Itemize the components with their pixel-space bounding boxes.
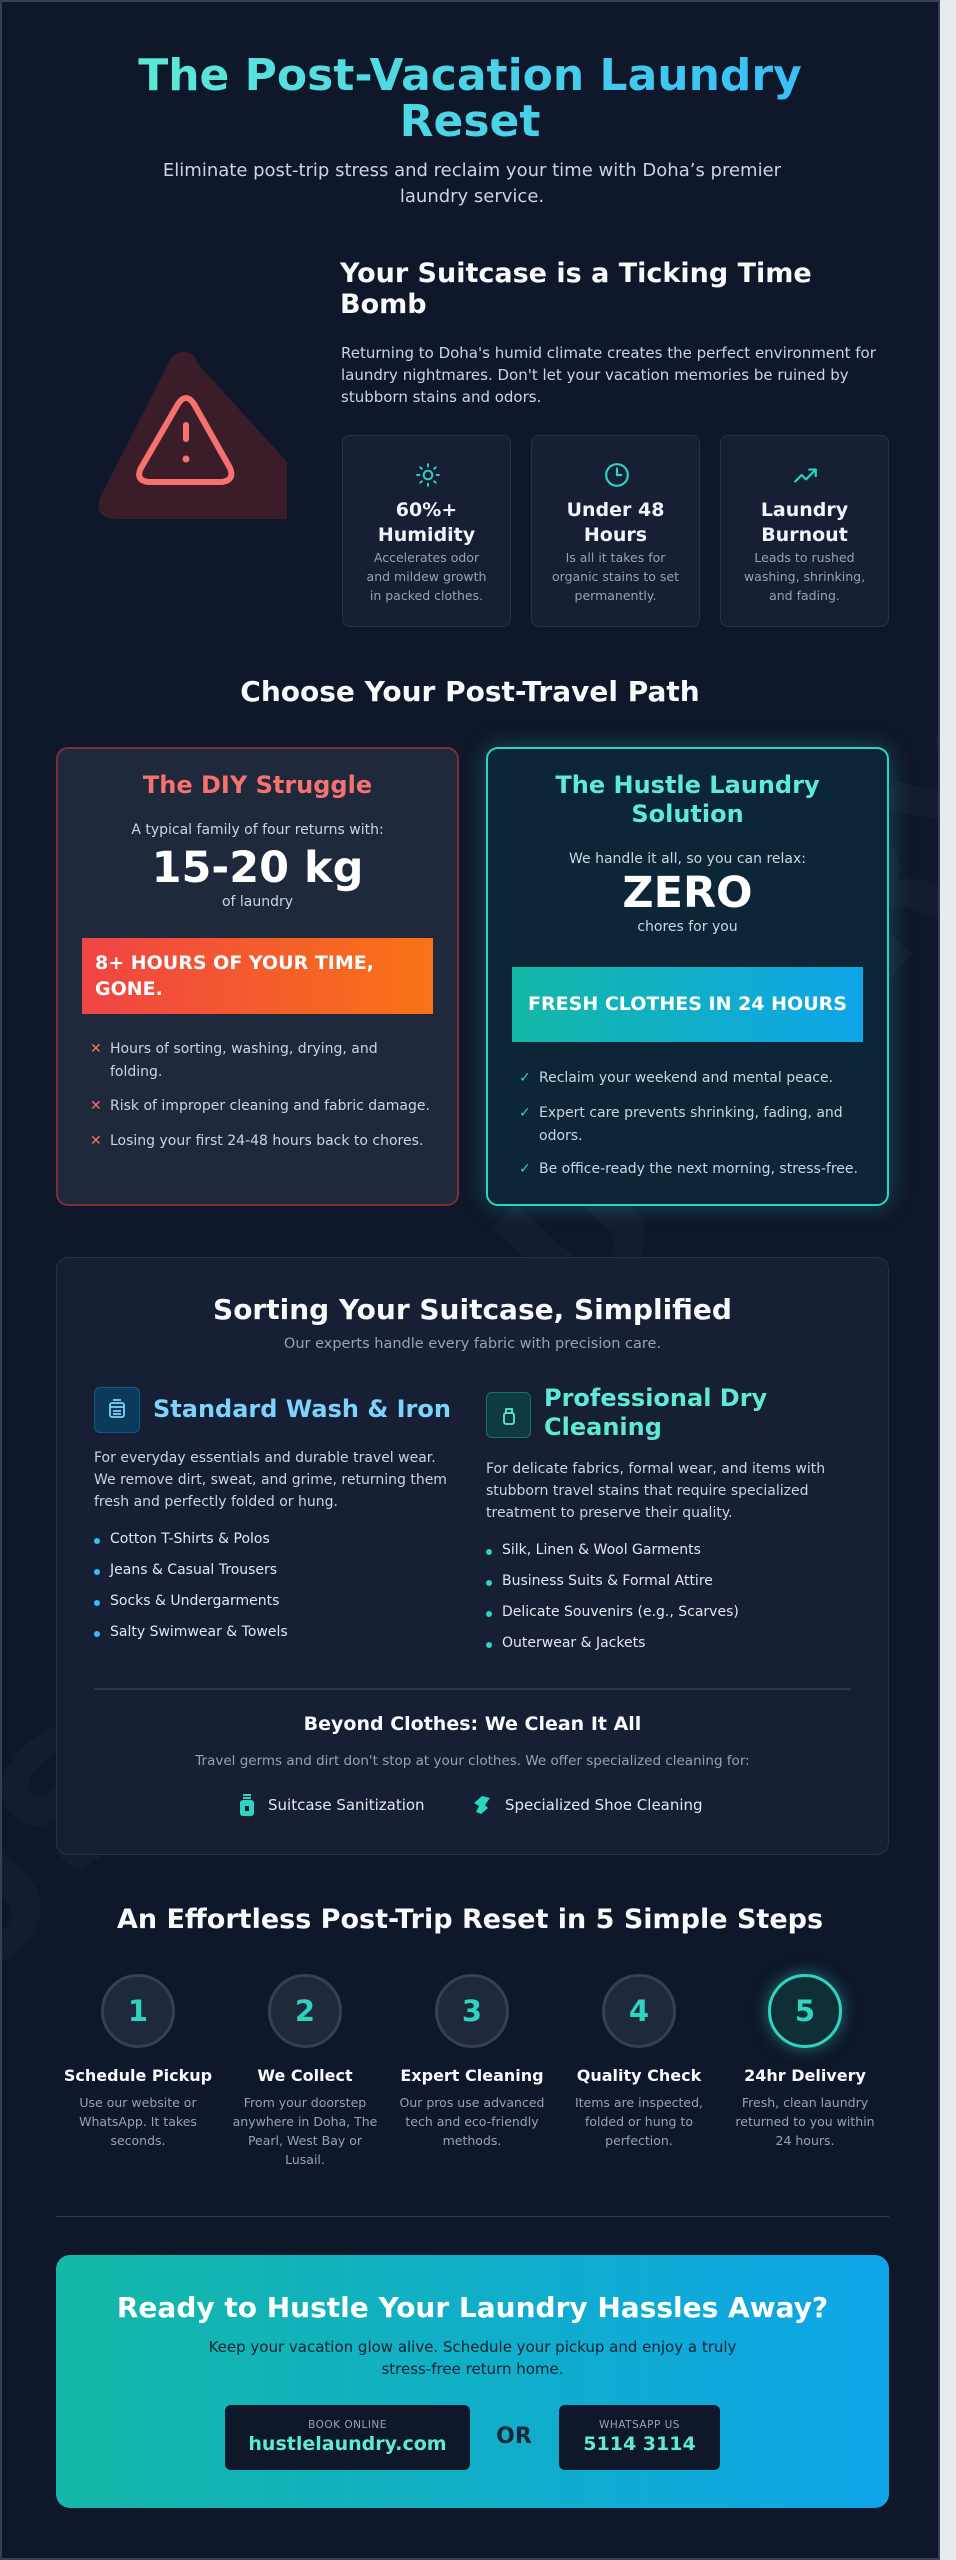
step 3: 3 [462,1994,482,2028]
heading: choose path: Choose Your Post-Travel Path [240,675,700,708]
heading: beyond clothes: Beyond Clothes: We Clean It All [304,1713,641,1735]
description: For delicate fabrics, formal wear, and items with stubborn travel stains that require specialized treatment to preserve their quality. [486,1461,825,1521]
OR: OR [496,2424,532,2449]
item: suitcase sanitization: Suitcase Sanitization [268,1796,425,1814]
bullet list: Salty Swimwear & Towels [110,1624,288,1640]
step 2: From your doorstep anywhere in Doha, The Pearl, West Bay or Lusail. [233,2095,377,2167]
stat card: burnout [720,435,889,627]
step 2: We Collect [257,2066,353,2085]
bullet list: Jeans & Casual Trousers [110,1562,277,1578]
DIY callout [82,938,433,1014]
solution stat [569,851,806,935]
DIY callout: 8+ HOURS OF YOUR TIME, GONE. [95,952,374,1000]
button: book online: BOOK ONLINE [308,2419,387,2431]
stat card: burnout: Laundry [761,499,848,521]
heading: Professional Dry Cleaning [544,1384,767,1441]
description: For everyday essentials and durable travel wear. We remove dirt, sweat, and grime, returning them fresh and perfectly folded or hung. [94,1450,447,1510]
icon: washer [94,1387,140,1433]
panel: Hustle solution: ✓ [519,1105,531,1121]
bullet list: Outerwear & Jackets [502,1635,645,1651]
solution title [555,771,820,828]
heading: Standard Wash & Iron [153,1395,451,1423]
button: whatsapp: 5114 3114 [583,2433,696,2455]
stat card: humidity: Humidity [378,524,475,546]
panel: DIY struggle: ✕ [90,1041,102,1057]
DIY list: Hours of sorting, washing, drying, and folding. [110,1041,378,1080]
bullet list: Socks & Undergarments [110,1593,279,1609]
step 5: 5 [795,1994,815,2028]
column: standard wash [94,1387,451,1640]
bullet list: Business Suits & Formal Attire [502,1573,713,1589]
step 4 [575,1974,703,2148]
solution callout [512,967,863,1042]
DIY title: The DIY Struggle [143,771,372,799]
item: suitcase sanitization [240,1794,425,1816]
stat card: 48 hours [531,435,700,627]
solution stat: We handle it all, so you can relax: [569,851,806,867]
step 1: 1 [128,1994,148,2028]
bullet list [486,1542,739,1651]
step 4: Items are inspected, folded or hung to perfection. [575,2095,703,2148]
panel: DIY struggle: ✕ [90,1133,102,1149]
bullet list: Cotton T-Shirts & Polos [110,1531,270,1547]
step 5 [735,1965,875,2148]
item: shoe cleaning: Specialized Shoe Cleaning [505,1796,703,1814]
solution list [519,1070,858,1177]
stat card: burnout: Leads to rushed washing, shrinking, and fading. [744,550,865,603]
step 3: Expert Cleaning [400,2066,544,2085]
solution stat: ZERO [622,868,753,918]
solution title: The Hustle Laundry [555,771,820,799]
bullet list [94,1531,288,1640]
bullet list: Silk, Linen & Wool Garments [502,1542,701,1558]
title: The Post-Vacation Laundry [138,50,802,101]
panel: DIY struggle: ✕ [90,1098,102,1114]
text: humidity intro: Returning to Doha's humid climate creates the perfect environment for laundry nightmares. Don't let your vacation memories be ruined by stubborn stains and odors. [341,344,876,406]
step 2 [233,1974,377,2167]
stat card: humidity [342,435,511,627]
DIY stat: of laundry [222,894,293,910]
button: whatsapp [559,2405,720,2470]
step 5: Fresh, clean laundry returned to you within 24 hours. [735,2095,875,2148]
step 1: Schedule Pickup [64,2066,212,2085]
panel: Hustle solution [486,747,889,1206]
step 4: Quality Check [577,2066,701,2085]
stat card: 48 hours: Under 48 [567,499,664,521]
solution list: Be office-ready the next morning, stress-free. [539,1161,858,1177]
DIY list [90,1041,430,1149]
stat card: burnout: Burnout [761,524,848,546]
CTA title: Ready to Hustle Your Laundry Hassles Away? [117,2291,828,2324]
solution stat: chores for you [637,919,738,935]
panel: Hustle solution: ✓ [519,1070,531,1086]
stat card: humidity: 60%+ [396,499,457,521]
step 1 [64,1974,212,2148]
panel: DIY struggle [56,747,459,1206]
CTA text: Keep your vacation glow alive. Schedule your pickup and enjoy a truly stress-free return home. [209,2338,736,2378]
panel: Hustle solution: ✓ [519,1161,531,1177]
heading: 5 steps: An Effortless Post-Trip Reset in 5 Simple Steps [117,1904,823,1935]
stat card: 48 hours: Hours [584,524,647,546]
DIY stat: 15-20 kg [152,843,363,893]
steps [64,1965,875,2167]
solution title: Solution [631,800,744,828]
DIY list: Risk of improper cleaning and fabric damage. [110,1098,430,1114]
title [120,53,820,145]
step 5: 24hr Delivery [744,2066,866,2085]
DIY list: Losing your first 24-48 hours back to chores. [110,1133,423,1149]
subtitle: Eliminate post-trip stress and reclaim your time with Doha’s premier laundry service. [163,160,781,207]
sorting title: Sorting Your Suitcase, Simplified [213,1293,732,1326]
sorting subtitle: Our experts handle every fabric with precision care. [284,1336,661,1352]
text: beyond clothes: Travel germs and dirt don't stop at your clothes. We offer specialized cleaning for: [195,1753,750,1769]
button: book online [225,2405,470,2470]
heading: ticking time bomb: Your Suitcase is a Ticking Time Bomb [340,258,812,320]
stat card: humidity: Accelerates odor and mildew growth in packed clothes. [367,550,486,603]
button: book online: hustlelaundry.com [248,2433,447,2455]
step 3 [400,1974,544,2148]
step 1: Use our website or WhatsApp. It takes seconds. [79,2095,197,2148]
icon: warning triangle [98,352,287,519]
solution list: Reclaim your weekend and mental peace. [539,1070,833,1086]
step 4: 4 [629,1994,649,2028]
icon: bottle [486,1392,531,1438]
step 3: Our pros use advanced tech and eco-friendly methods. [400,2095,544,2148]
DIY stat [131,822,384,910]
bullet list: Delicate Souvenirs (e.g., Scarves) [502,1604,739,1620]
solution callout: FRESH CLOTHES IN 24 HOURS [528,993,847,1015]
title: Reset [400,96,540,147]
stat card: 48 hours: Is all it takes for organic stains to set permanently. [552,550,679,603]
solution list: Expert care prevents shrinking, fading, and odors. [539,1105,843,1144]
button: whatsapp: WHATSAPP US [599,2419,680,2431]
panel: sorting suitcase [56,1257,889,1855]
column: dry cleaning [486,1384,825,1651]
CTA panel [56,2255,889,2508]
DIY stat: A typical family of four returns with: [131,822,384,838]
step 2: 2 [295,1994,315,2028]
